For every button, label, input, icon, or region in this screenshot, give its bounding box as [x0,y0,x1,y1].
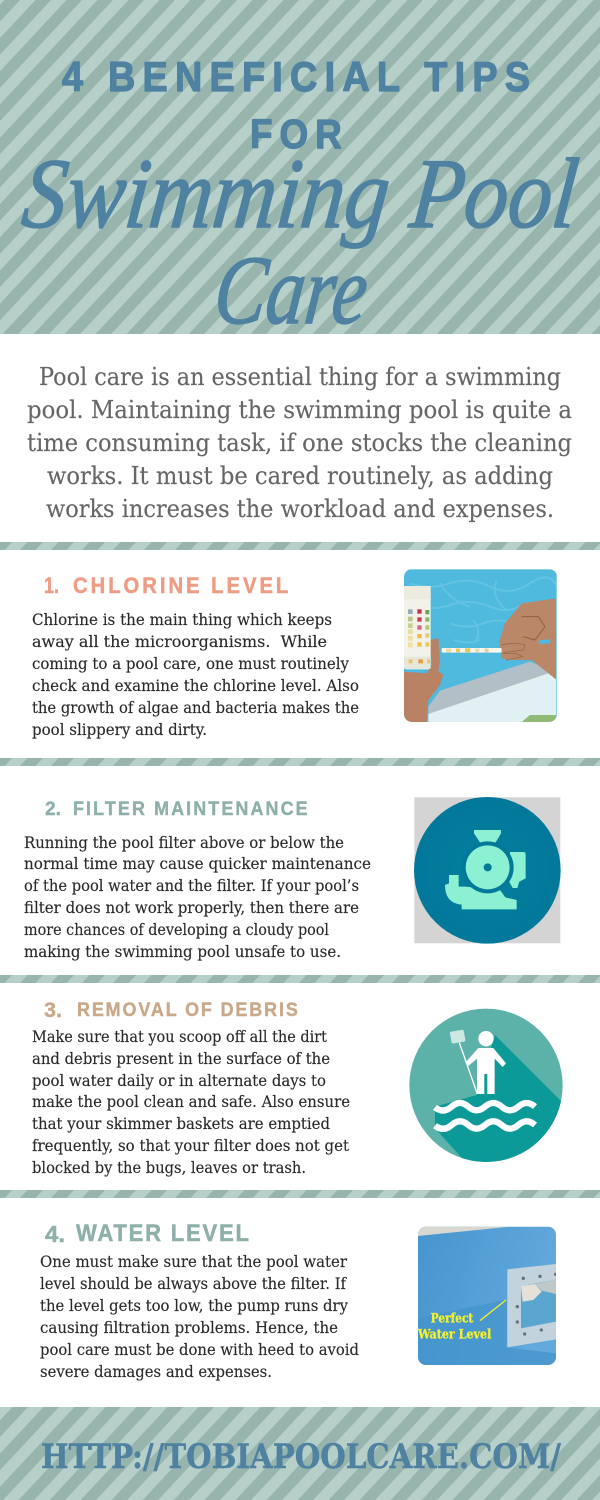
text: chlorine body: away all the microorganisms. While [32,633,327,651]
text: water level body: causing filtration problems. Hence, the [40,1319,338,1337]
text: chlorine body: check and examine the chlorine level. Also [32,677,359,695]
text: debris body: Make sure that you scoop off all the dirt [32,1028,328,1046]
intro paragraph: pool. Maintaining the swimming pool is quite a [27,395,572,424]
heading: water level: WATER LEVEL [76,1219,249,1246]
text: water level body: pool care must be done with heed to avoid [40,1341,359,1359]
text: filter body: filter does not work properly, then there are [24,899,359,917]
intro paragraph [27,362,572,523]
text: debris body: make the pool clean and safe. Also ensure [32,1093,350,1111]
text: filter body: of the pool water and the filter. If your pool’s [24,877,359,895]
text: water level body: severe damages and expenses. [40,1363,272,1381]
text: chlorine body: Chlorine is the main thing which keeps [32,611,332,629]
panel: chlorine level [32,569,557,739]
text: filter body: Running the pool filter above or below the [24,834,344,852]
label: perfect water level [417,1311,491,1343]
title: 4 beneficial tips for: FOR [250,112,342,157]
panel: filter maintenance [24,797,561,961]
text: debris body: and debris present in the surface of the [32,1050,330,1068]
heading: removal of debris: REMOVAL OF DEBRIS [77,998,298,1020]
panel: water level [40,1219,557,1381]
heading: water level: 4. [45,1221,65,1247]
icon: pool pump [414,797,561,944]
text: filter body [24,834,371,961]
intro paragraph: works. It must be cared routinely, as adding [47,461,553,490]
heading: chlorine level: 1. [44,573,59,598]
text: debris body: blocked by the bugs, leaves or trash. [32,1159,306,1177]
text: chlorine body [32,611,359,739]
heading: removal of debris: 3. [44,999,62,1022]
label: perfect water level: Perfect [431,1311,474,1327]
image: perfect water level [417,1227,557,1365]
title: swimming pool care: Care [210,236,373,345]
text: debris body: frequently, so that your filter does not get [32,1137,350,1155]
panel: removal of debris [32,998,567,1177]
icon: person skimming pool [409,1009,567,1167]
image: chlorine test strip [404,569,557,722]
text: debris body [32,1028,350,1177]
text: filter body: normal time may cause quicker maintenance [24,855,371,873]
heading: filter maintenance: 2. [45,799,61,820]
text: water level body: the level gets too low, the pump runs dry [40,1297,348,1315]
text: debris body: that your skimmer baskets are emptied [32,1115,330,1133]
text: chlorine body: coming to a pool care, one must routinely [32,655,349,673]
heading: filter maintenance: FILTER MAINTENANCE [73,797,308,819]
heading: chlorine level: CHLORINE LEVEL [73,574,288,598]
header banner [0,0,600,345]
text: filter body: more chances of developing a cloudy pool [24,921,329,939]
text: filter body: making the swimming pool unsafe to use. [24,943,341,961]
text: water level body [40,1253,359,1381]
text: water level body: level should be always above the filter. If [40,1275,347,1293]
intro paragraph: Pool care is an essential thing for a swimming [39,362,561,391]
text: debris body: pool water daily or in alternate days to [32,1072,326,1090]
label: perfect water level: Water Level [417,1327,491,1343]
text: chlorine body: the growth of algae and bacteria makes the [32,699,359,717]
text: chlorine body: pool slippery and dirty. [32,721,207,739]
text: water level body: One must make sure that the pool water [40,1253,348,1271]
footer banner [0,1407,600,1500]
intro paragraph: works increases the workload and expenses. [46,494,554,523]
title: 4 beneficial tips for [62,54,530,157]
title: 4 beneficial tips for: 4 BENEFICIAL TIPS [62,54,530,100]
title: swimming pool care [18,138,583,345]
